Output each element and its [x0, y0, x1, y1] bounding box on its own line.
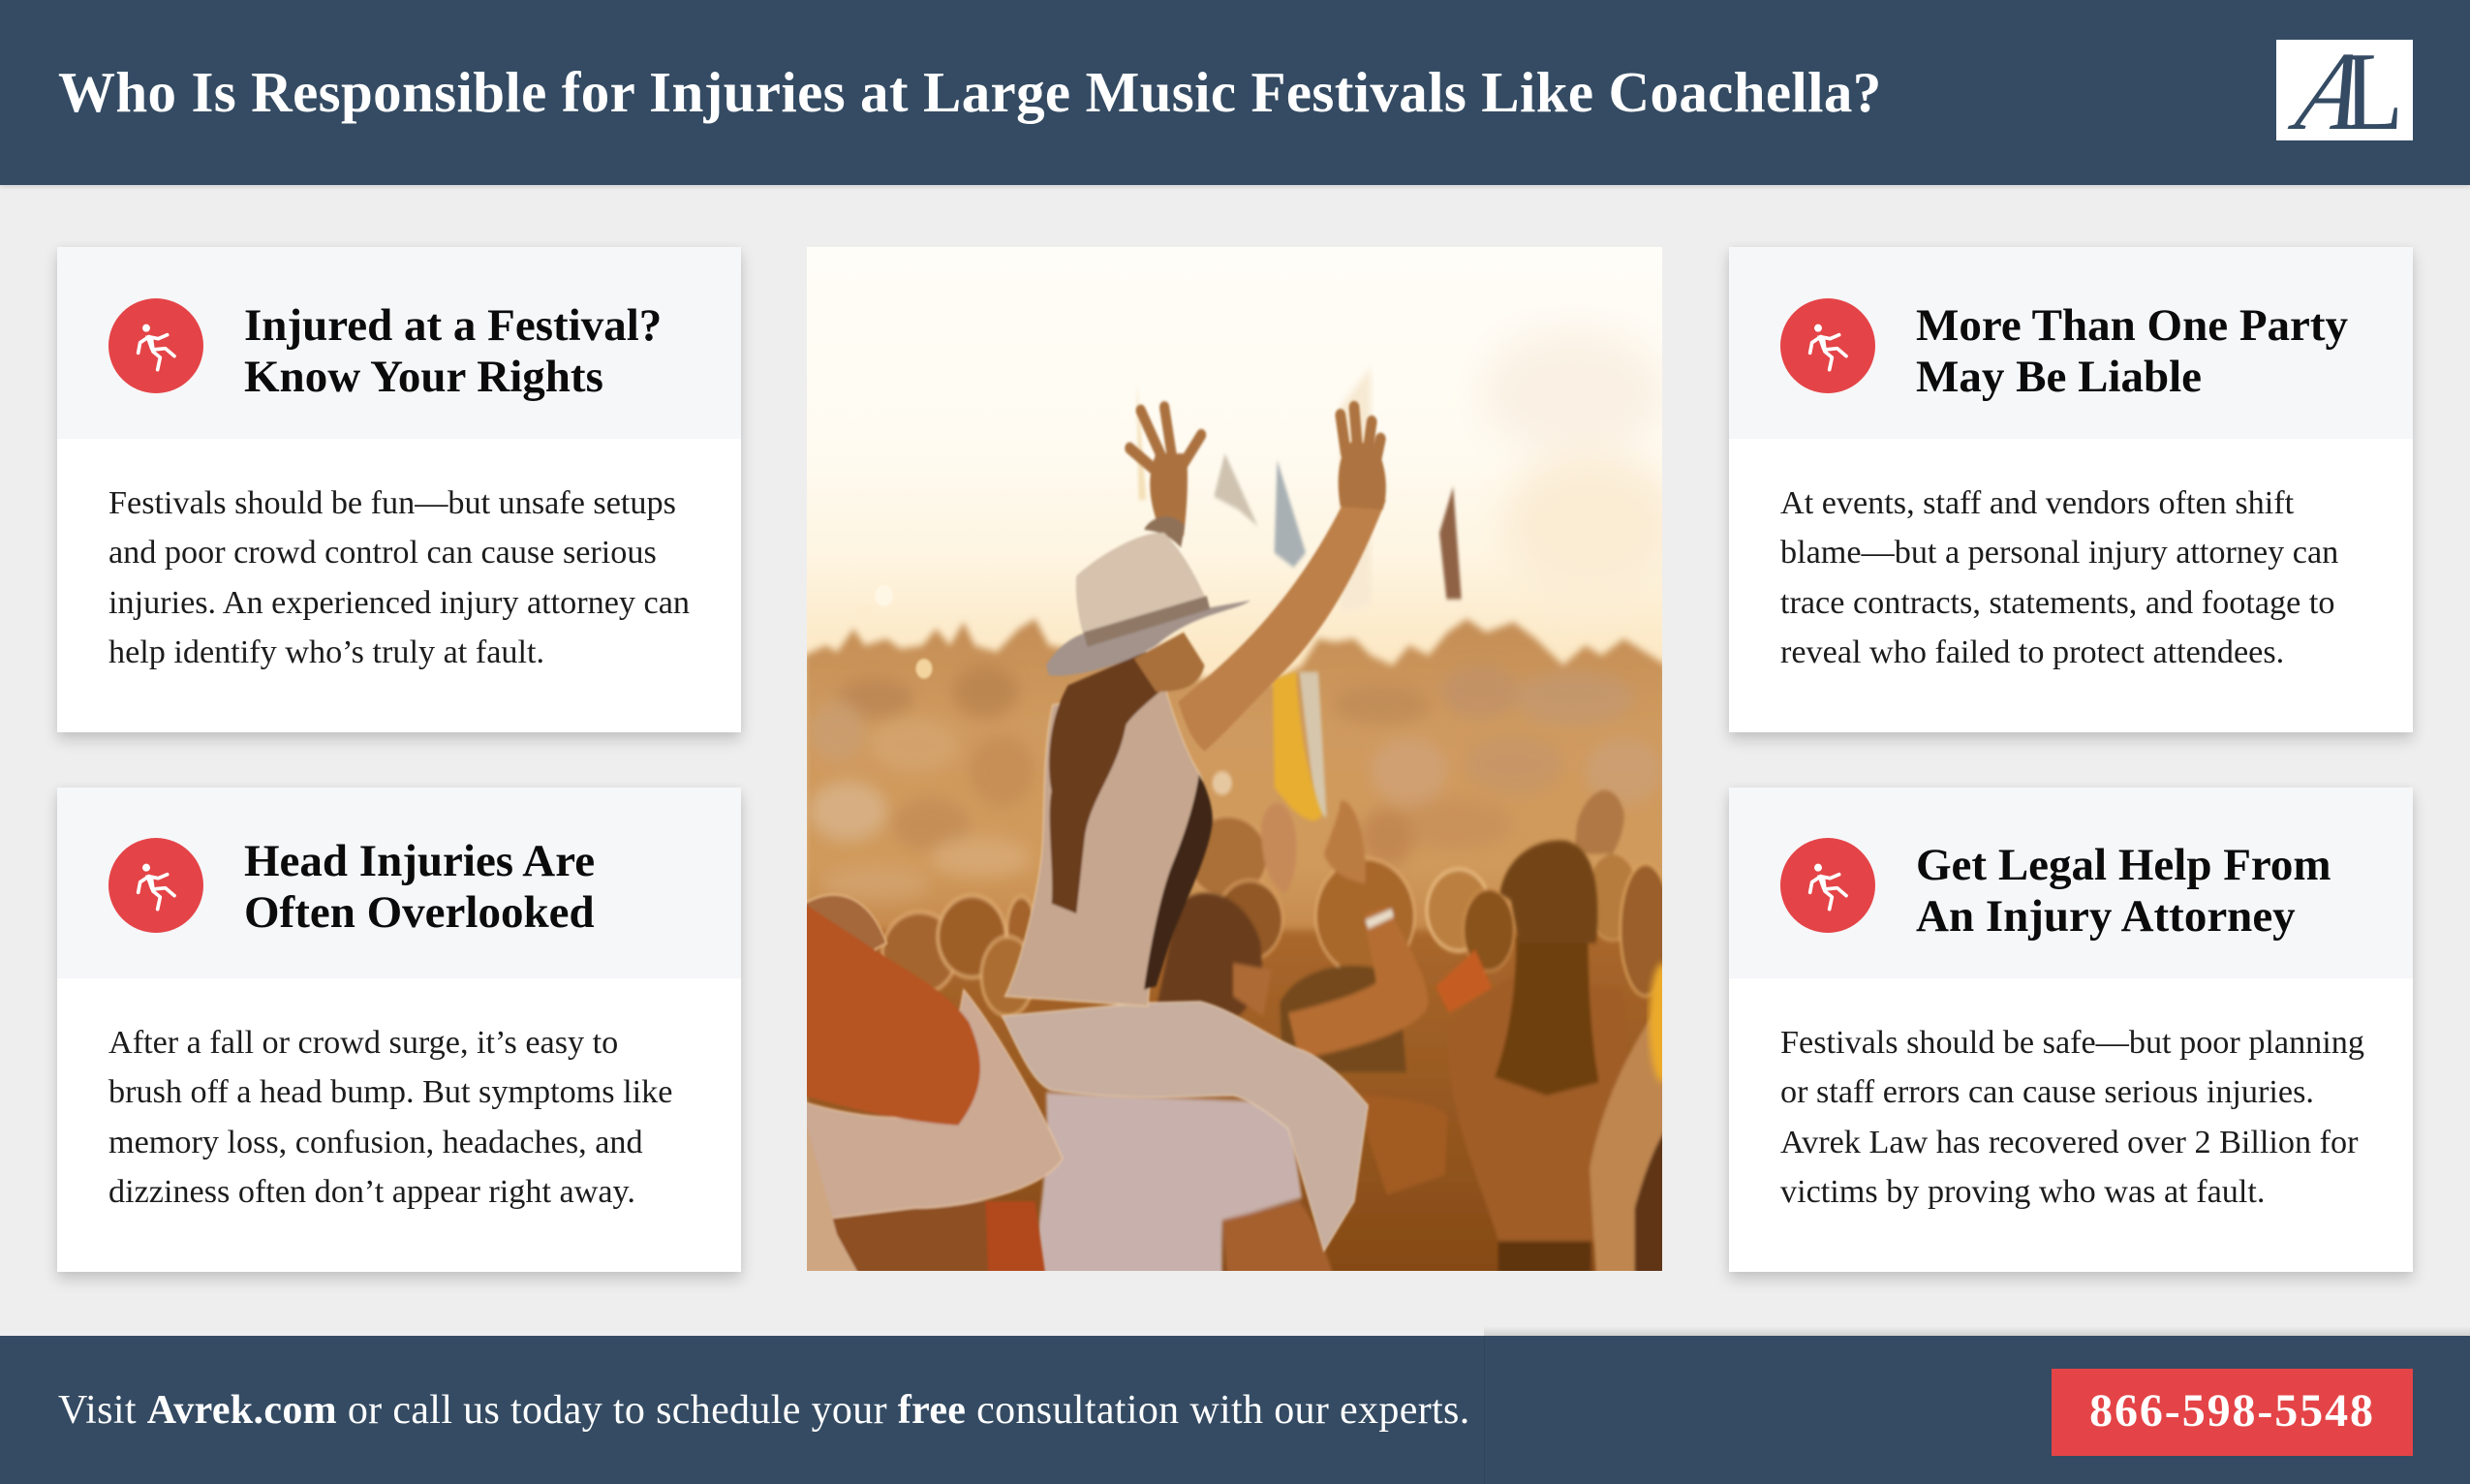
body text: reveal who failed to protect attendees. — [1780, 634, 2284, 670]
person with cap at right — [1448, 841, 1667, 1280]
body text: blame—but a personal injury attorney can — [1780, 535, 2338, 571]
footer band — [0, 1336, 2470, 1484]
body text: After a fall or crowd surge, it’s easy to — [108, 1025, 618, 1061]
left hand — [1129, 407, 1201, 547]
body text: help identify who’s truly at fault. — [108, 634, 544, 670]
title: Who Is Responsible for Injuries at Large Music Festivals Like Coachella? — [58, 60, 1882, 124]
panel: injured at a festival — [57, 247, 741, 732]
body text — [1780, 1025, 2364, 1210]
heading: May Be Liable — [1916, 352, 2202, 402]
body text: Festivals should be fun—but unsafe setups — [108, 485, 676, 521]
flags — [1137, 384, 1462, 599]
body text: Avrek Law has recovered over 2 Billion for — [1780, 1125, 2358, 1160]
body text: dizziness often don’t appear right away. — [108, 1174, 635, 1210]
hat — [1046, 533, 1250, 676]
hair — [1049, 652, 1189, 913]
torso — [1004, 685, 1202, 1006]
man with red jacket at left — [804, 895, 1063, 1280]
heading: Get Legal Help From — [1916, 839, 2331, 889]
photo: festival crowd at sunset — [807, 247, 1662, 1271]
body text: and poor crowd control can cause serious — [108, 535, 657, 571]
heading: An Injury Attorney — [1916, 891, 2296, 942]
icon: falling person — [1780, 838, 1875, 933]
man in white shirt — [1030, 893, 1335, 1280]
panel header — [1729, 247, 2413, 439]
sky — [804, 242, 1679, 1280]
legs — [1003, 1002, 1368, 1252]
heading — [1916, 839, 2331, 942]
logo: AL monogram — [2276, 40, 2413, 140]
body text: victims by proving who was at fault. — [1780, 1174, 2265, 1210]
distant crowd — [804, 619, 1667, 970]
icon: falling person — [108, 838, 203, 933]
phone button — [2052, 1369, 2413, 1456]
body text: At events, staff and vendors often shift — [1780, 485, 2294, 521]
body text: Festivals should be safe—but poor planning — [1780, 1025, 2364, 1061]
body text: trace contracts, statements, and footage to — [1780, 585, 2334, 621]
body text: or staff errors can cause serious injuries. — [1780, 1074, 2314, 1110]
header band — [0, 0, 2470, 185]
woman on shoulders — [1003, 407, 1386, 1252]
call to action text: Visit Avrek.com or call us today to schedule your free consultation with our experts. — [58, 1388, 1470, 1433]
phone number: 866-598-5548 — [2089, 1385, 2375, 1437]
black top — [1144, 775, 1213, 990]
body text — [1780, 485, 2338, 670]
heading: Injured at a Festival? — [244, 300, 662, 351]
panel header — [57, 788, 741, 978]
heading — [244, 300, 662, 402]
neck and hair under hat — [1134, 633, 1205, 692]
panel: get legal help — [1729, 788, 2413, 1272]
raised right arm — [1178, 500, 1386, 752]
heading: Often Overlooked — [244, 887, 595, 938]
lens flare — [1649, 963, 1676, 1082]
heading: Know Your Rights — [244, 352, 603, 402]
body text: memory loss, confusion, headaches, and — [108, 1125, 643, 1160]
panel header — [57, 247, 741, 439]
right hand — [1339, 407, 1386, 510]
heading: More Than One Party — [1916, 300, 2348, 351]
heading: Head Injuries Are — [244, 835, 595, 885]
icon: falling person — [108, 298, 203, 393]
body text — [108, 1025, 672, 1210]
foreground crowd — [804, 790, 1671, 1280]
body text: brush off a head bump. But symptoms like — [108, 1074, 672, 1110]
panel: more than one party — [1729, 247, 2413, 732]
panel header — [1729, 788, 2413, 978]
heading — [244, 835, 595, 938]
body text: injuries. An experienced injury attorney can — [108, 585, 690, 621]
body text — [108, 485, 690, 670]
icon: falling person — [1780, 298, 1875, 393]
heading — [1916, 300, 2348, 402]
panel: head injuries — [57, 788, 741, 1272]
